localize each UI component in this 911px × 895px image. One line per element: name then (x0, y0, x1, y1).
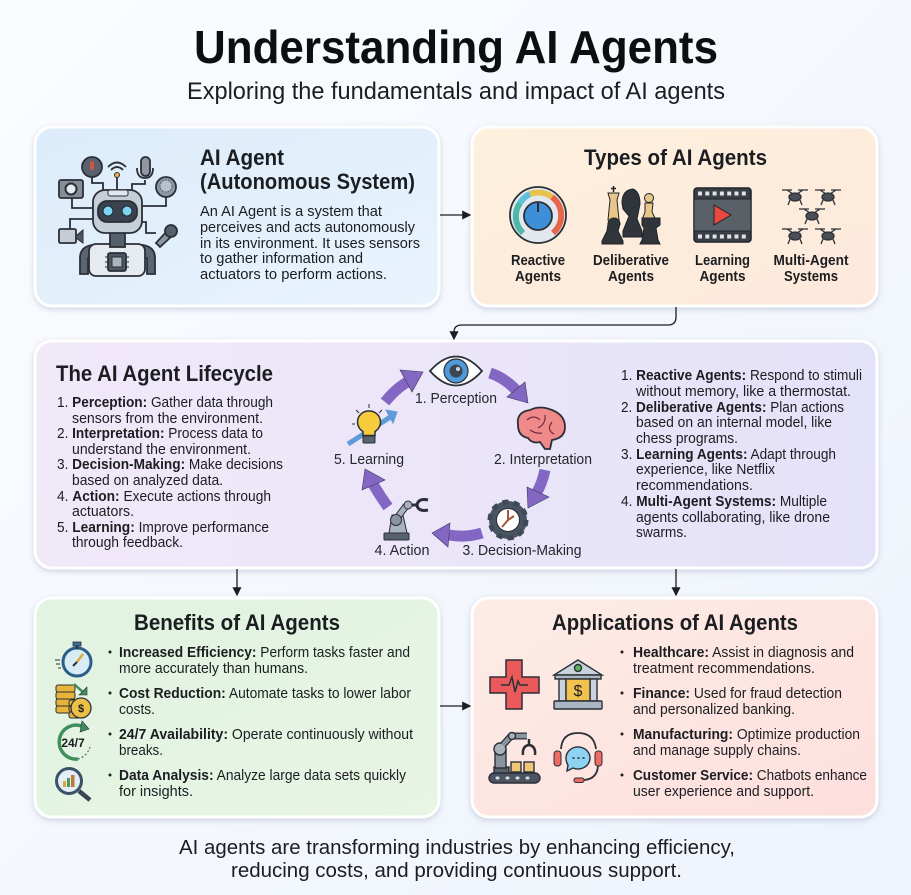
footer summary: AI agents are transforming industries by enhancing efficiency, (179, 837, 735, 859)
list: lifecycle steps (57, 395, 283, 551)
list: agent type descriptions (621, 368, 862, 541)
labels: agent types: Agents (515, 269, 561, 285)
labels: agent types: Deliberative (593, 253, 669, 269)
list: applications: treatment recommendations. (633, 661, 815, 677)
label: learning: 5. Learning (334, 452, 404, 468)
list: benefits: Cost Reduction: Automate tasks to lower labor (119, 686, 411, 702)
list: lifecycle steps: 2. Interpretation: Process data to (57, 426, 263, 442)
list: applications: Manufacturing: Optimize production (633, 727, 860, 743)
list: agent type descriptions: 1. Reactive Agents: Respond to stimuli (621, 368, 862, 384)
text: definition: An AI Agent is a system that (200, 204, 382, 220)
icon: film strip (694, 188, 751, 242)
icon: coins (56, 684, 91, 718)
icon: 24/7 clock: 24/7 (61, 736, 85, 750)
list: applications: user experience and support. (633, 784, 814, 800)
icon: gear with clock (490, 502, 526, 538)
icon: dial gauge (510, 187, 566, 243)
list: applications (620, 645, 867, 800)
list: benefits: Data Analysis: Analyze large data sets quickly (119, 768, 407, 784)
icon: factory robot arm (489, 732, 540, 783)
list: applications: Customer Service: Chatbots enhance (633, 768, 867, 784)
list: lifecycle steps: actuators. (72, 504, 134, 520)
icon: robot arm (384, 500, 428, 540)
labels: agent types: Agents (608, 269, 654, 285)
icon: bank (554, 660, 602, 709)
list: agent type descriptions: based on an internal model, like (636, 415, 832, 431)
text: definition: to gather information and (200, 251, 363, 267)
list: agent type descriptions: 4. Multi-Agent Systems: Multiple (621, 494, 827, 510)
arrow: action to learning (362, 469, 388, 507)
list: lifecycle steps: sensors from the environment. (72, 411, 263, 427)
icon: headset with chat (554, 733, 602, 782)
icon: eye (430, 356, 482, 386)
subtitle: Exploring the fundamentals and impact of AI agents (187, 78, 725, 105)
list: lifecycle steps: 3. Decision-Making: Make decisions (57, 457, 283, 473)
footer summary: reducing costs, and providing continuous support. (231, 860, 682, 882)
list: benefits: for insights. (119, 784, 193, 800)
arrow: types to lifecycle (454, 307, 676, 339)
text: definition (200, 204, 420, 283)
icon: drone swarm (782, 190, 841, 244)
list: benefits: breaks. (119, 743, 163, 759)
panel: lifecycle (35, 341, 877, 568)
list: benefits (108, 645, 413, 800)
list: agent type descriptions: without memory, like a thermostat. (635, 384, 851, 400)
icon: medical cross (490, 660, 539, 709)
title: Understanding AI Agents (194, 21, 718, 73)
heading: lifecycle: The AI Agent Lifecycle (56, 361, 273, 386)
list: lifecycle steps: understand the environment. (72, 442, 251, 458)
icon: chess pieces (602, 186, 660, 244)
list: lifecycle steps: based on analyzed data. (72, 473, 223, 489)
list: agent type descriptions: 2. Deliberative Agents: Plan actions (621, 400, 844, 416)
icon: robot with sensors (59, 157, 177, 276)
list: applications: and manage supply chains. (633, 743, 801, 759)
icon: light bulb with growth arrow (348, 404, 397, 444)
arrow: perception to interpretation (490, 373, 528, 403)
panel: benefits (35, 598, 439, 817)
arrow: lifecycle to applications (675, 569, 677, 595)
arrow: lifecycle to benefits (236, 569, 238, 595)
list: agent type descriptions: recommendations. (636, 478, 753, 494)
list: applications: Finance: Used for fraud detection (633, 686, 842, 702)
heading: AI Agent: (Autonomous System) (200, 169, 415, 194)
list: lifecycle steps: 5. Learning: Improve performance (57, 520, 269, 536)
text: definition: in its environment. It uses sensors (200, 236, 420, 252)
list: benefits: costs. (119, 702, 155, 718)
list: lifecycle steps: 1. Perception: Gather data through (57, 395, 273, 411)
heading: types: Types of AI Agents (584, 145, 767, 170)
text: definition: actuators to perform actions. (200, 267, 387, 283)
labels: agent types: Reactive (511, 253, 565, 269)
panel: types of AI agents (472, 127, 877, 306)
heading: applications: Applications of AI Agents (552, 610, 798, 635)
labels: agent types: Learning (695, 253, 750, 269)
list: benefits: 24/7 Availability: Operate continuously without (119, 727, 413, 743)
list: agent type descriptions: chess programs. (636, 431, 738, 447)
list: agent type descriptions: agents collaborating, like drone (636, 510, 830, 526)
list: lifecycle steps: 4. Action: Execute actions through (57, 489, 271, 505)
label: interpretation: 2. Interpretation (494, 452, 592, 468)
list: applications: and personalized banking. (633, 702, 795, 718)
label: decision-making: 3. Decision-Making (462, 543, 582, 559)
labels: agent types: Systems (784, 269, 838, 285)
panel: applications (472, 598, 877, 817)
arrow: benefits to applications (440, 705, 470, 707)
icon: brain (518, 408, 565, 449)
labels: agent types: Agents (700, 269, 746, 285)
labels: agent types (511, 253, 849, 285)
icon: magnifier chart (56, 768, 90, 800)
panel: AI agent definition (35, 127, 439, 306)
list: agent type descriptions: swarms. (636, 525, 687, 541)
icon: 24/7 clock (59, 721, 90, 759)
arrow: decision-making to action (432, 523, 482, 547)
arrow: learning to perception (385, 370, 423, 402)
diagram: lifecycle cycle (334, 356, 592, 559)
list: lifecycle steps: through feedback. (72, 535, 183, 551)
label: perception: 1. Perception (415, 391, 497, 407)
icon: stopwatch (55, 642, 91, 676)
list: benefits: Increased Efficiency: Perform tasks faster and (119, 645, 410, 661)
list: applications: Healthcare: Assist in diagnosis and (633, 645, 854, 661)
heading: benefits: Benefits of AI Agents (134, 610, 340, 635)
arrow: interpretation to decision-making (527, 470, 549, 508)
icon: bank: $ (574, 683, 583, 700)
footer summary (179, 837, 735, 882)
labels: agent types: Multi-Agent (774, 253, 849, 269)
label: action: 4. Action (374, 543, 430, 559)
list: agent type descriptions: experience, like Netflix (636, 462, 776, 478)
icon: coins: $ (78, 703, 84, 715)
text: definition: perceives and acts autonomously (200, 220, 416, 236)
list: benefits: more accurately than humans. (119, 661, 308, 677)
list: agent type descriptions: 3. Learning Agents: Adapt through (621, 447, 836, 463)
heading: AI Agent (200, 145, 415, 194)
heading: AI Agent: AI Agent (200, 145, 285, 170)
arrow: definition to types (440, 214, 470, 216)
